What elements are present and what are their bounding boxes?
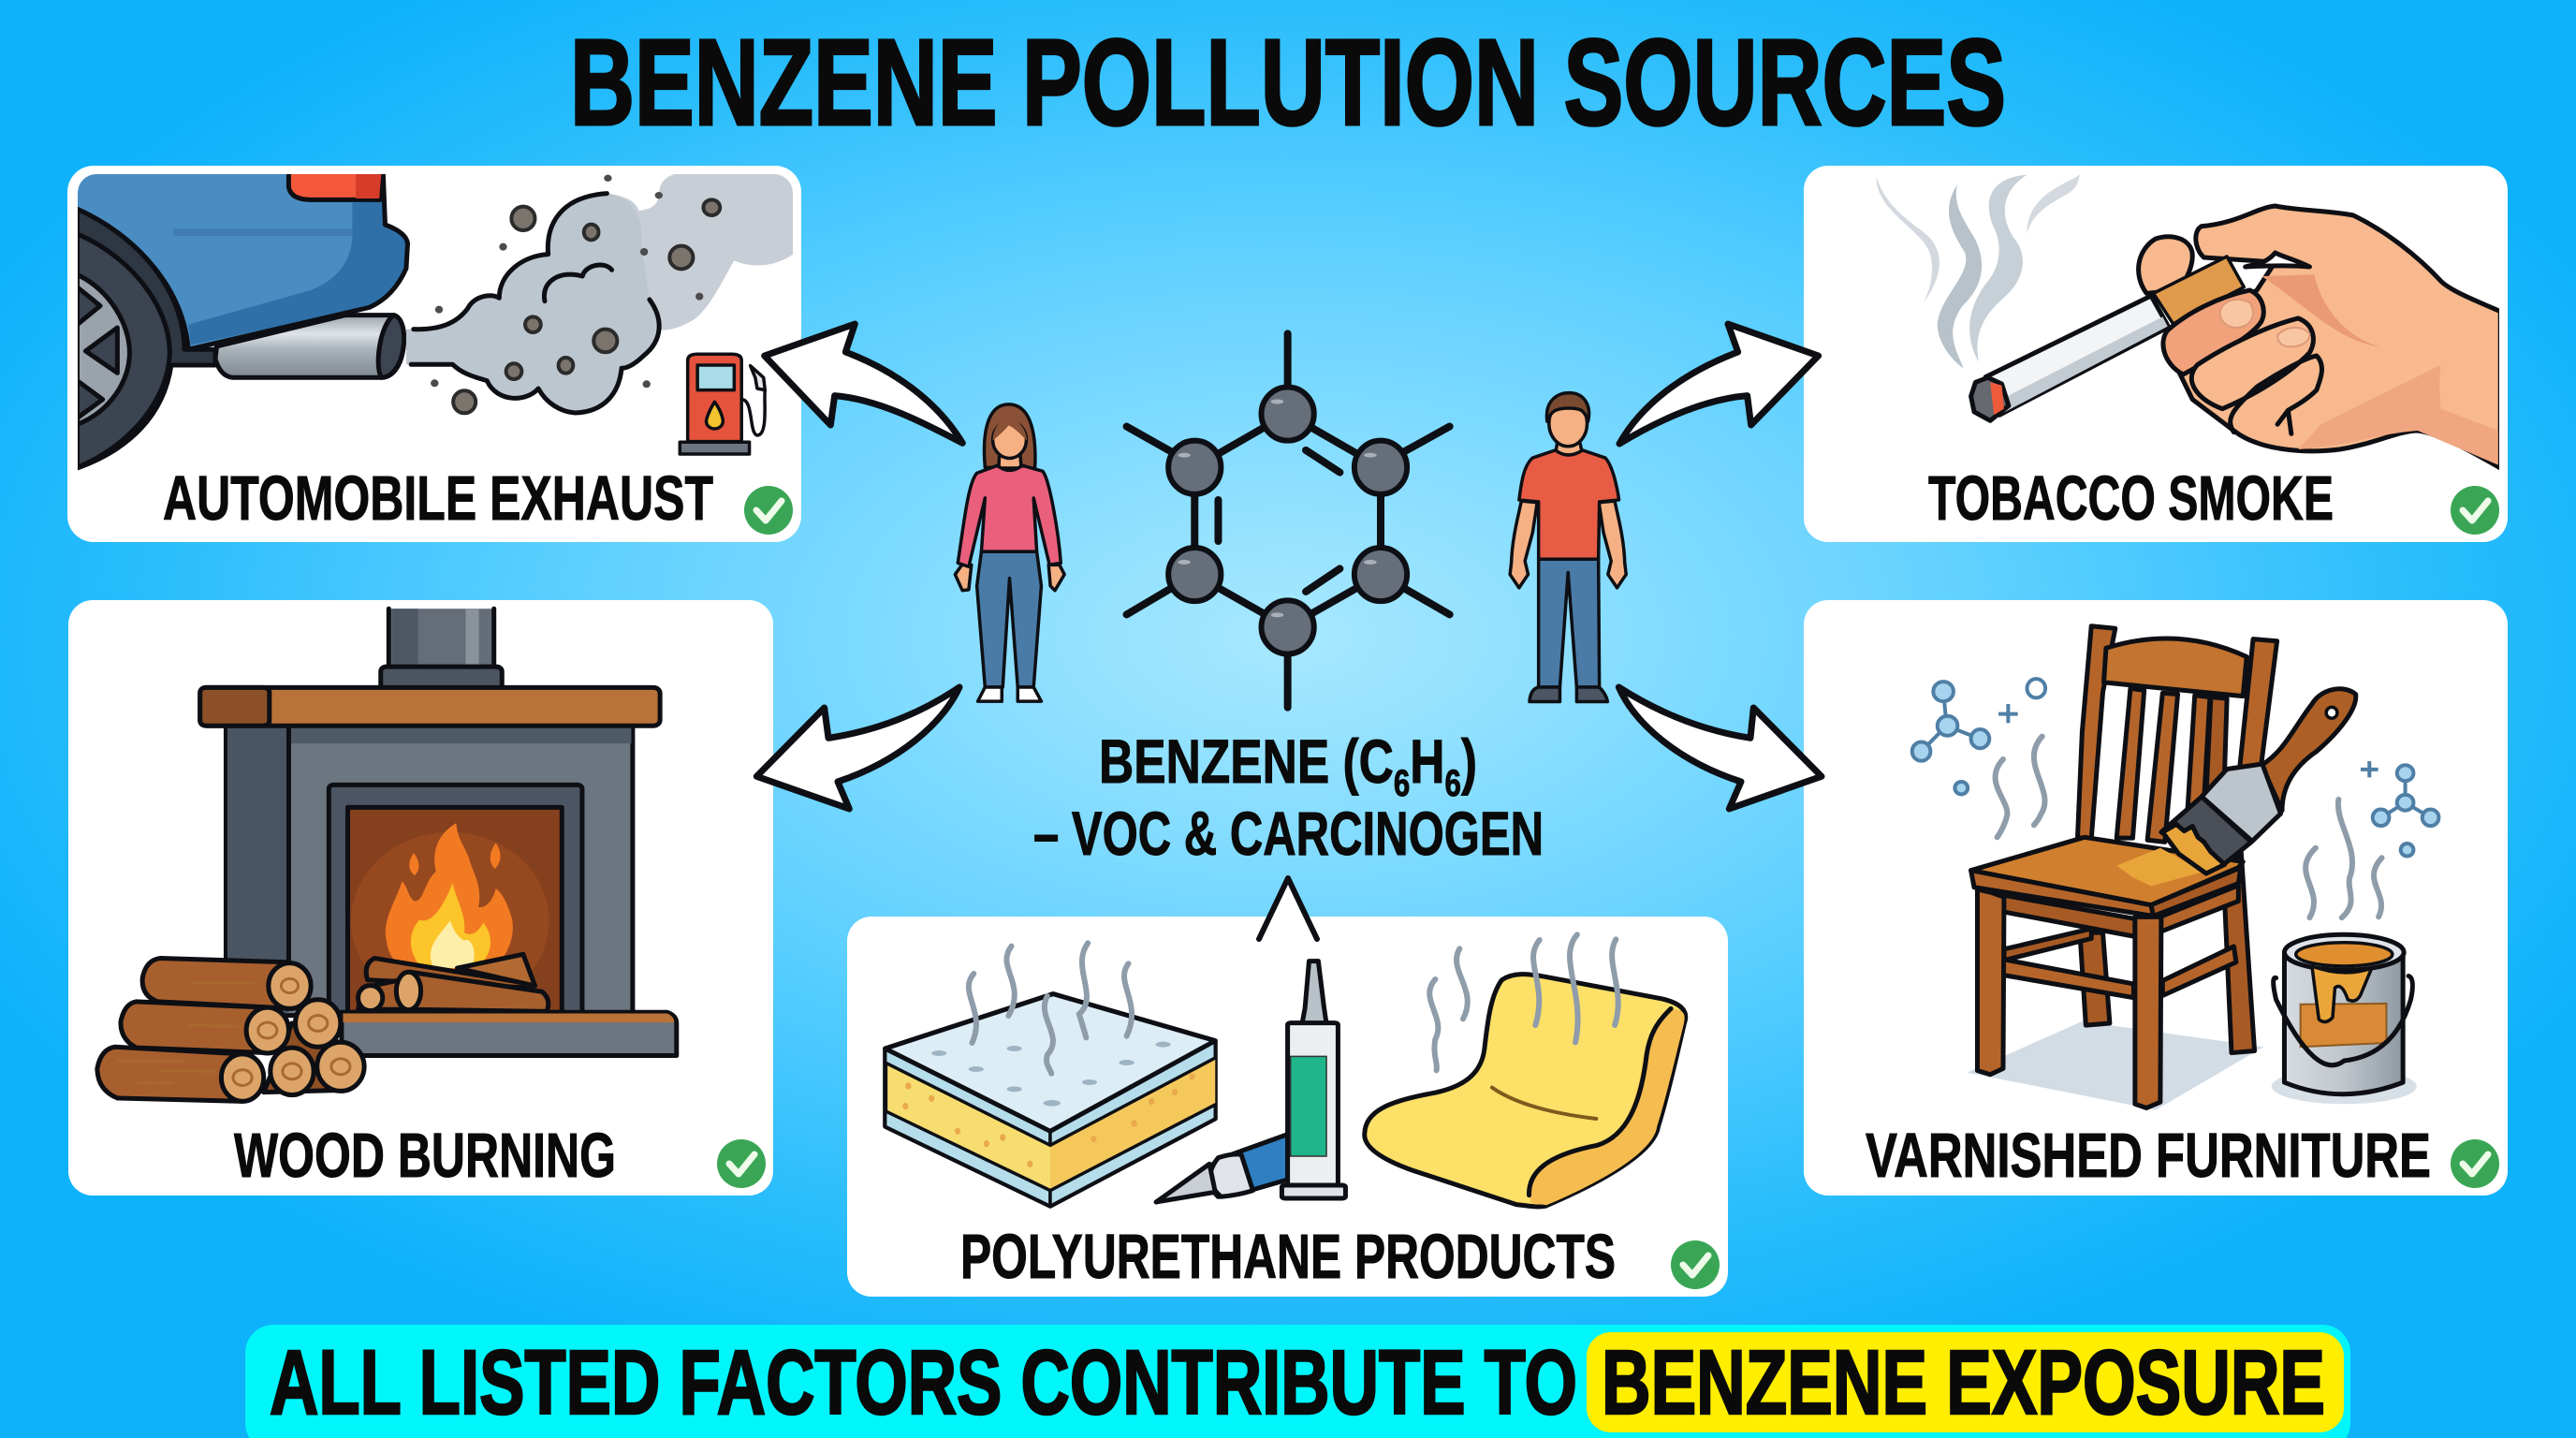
back legs and posts bbox=[2080, 932, 2110, 1025]
burning logs bbox=[366, 959, 531, 988]
yellow foam cushion bbox=[1365, 975, 1686, 1207]
label: automobile exhaust: AUTOMOBILE EXHAUST bbox=[163, 463, 713, 534]
label: wood burning: WOOD BURNING bbox=[234, 1121, 616, 1191]
caulk cartridge bbox=[1302, 961, 1326, 1023]
panel: varnished furniture bbox=[1804, 600, 2508, 1196]
sealant tube bbox=[1156, 1135, 1288, 1202]
arrow: to wood burning bbox=[756, 687, 959, 809]
illustration: chair, brush and can bbox=[1912, 626, 2438, 1110]
figure: man bbox=[1510, 393, 1626, 702]
panel: automobile exhaust bbox=[67, 166, 801, 542]
wheel bbox=[77, 209, 215, 468]
illustration: hand holding cigarette bbox=[1876, 175, 2500, 468]
mantel bbox=[200, 687, 660, 726]
arrow: to varnished furniture bbox=[1618, 687, 1822, 809]
smoke wisps bbox=[1876, 176, 1939, 302]
center label: benzene formula: ) bbox=[1461, 726, 1477, 796]
index finger bbox=[2139, 237, 2192, 293]
illustration: foam, sealant and cushion bbox=[886, 934, 1686, 1207]
title: BENZENE POLLUTION SOURCES bbox=[570, 13, 2006, 151]
banner text: ALL LISTED FACTORS CONTRIBUTE TO bbox=[270, 1331, 1577, 1433]
arrow: to automobile exhaust bbox=[765, 324, 962, 443]
top rail bbox=[2103, 638, 2247, 697]
center: people and molecule bbox=[955, 333, 1626, 708]
illustration: fireplace and logs bbox=[97, 609, 677, 1101]
flames bbox=[386, 823, 513, 970]
conclusion banner bbox=[245, 1325, 2350, 1438]
taillight bbox=[288, 171, 383, 199]
log stack bbox=[264, 1023, 341, 1093]
panel: wood burning bbox=[68, 600, 773, 1196]
main smoke cloud bbox=[406, 194, 659, 413]
highlight box bbox=[1587, 1332, 2344, 1432]
icon: green check bbox=[717, 1139, 766, 1188]
icon: green check bbox=[2451, 1139, 2499, 1188]
icon: green check bbox=[1671, 1240, 1720, 1289]
molecule: benzene ring bbox=[1127, 333, 1450, 708]
palm bbox=[2165, 206, 2500, 468]
center label: benzene formula: 6 bbox=[1394, 763, 1410, 804]
label: polyurethane products: POLYURETHANE PRODUCTS bbox=[960, 1222, 1616, 1292]
hearth bbox=[342, 1012, 677, 1056]
vapour lines bbox=[1996, 737, 2382, 917]
center label: voc and carcinogen: – VOC & CARCINOGEN bbox=[1033, 799, 1544, 868]
seat bbox=[1971, 837, 2243, 905]
center label: benzene formula: H bbox=[1410, 726, 1444, 796]
panel: polyurethane products bbox=[847, 917, 1728, 1297]
front legs bbox=[1977, 889, 2004, 1075]
vapour lines bbox=[969, 934, 1618, 1074]
cigarette bbox=[1985, 296, 2169, 415]
center label: benzene formula: 6 bbox=[1444, 763, 1461, 804]
far smoke bbox=[607, 174, 793, 330]
label: tobacco smoke: TOBACCO SMOKE bbox=[1928, 463, 2334, 534]
icon: green check bbox=[744, 486, 793, 535]
arrow: from polyurethane products bbox=[1259, 878, 1317, 939]
panel: tobacco smoke bbox=[1804, 166, 2508, 542]
paint brush bbox=[2261, 689, 2356, 811]
center label: benzene formula: BENZENE (C bbox=[1099, 726, 1476, 796]
molecule icons bbox=[1912, 679, 2438, 857]
icon: fuel pump bbox=[680, 354, 765, 454]
illustration: car and exhaust smoke bbox=[77, 171, 793, 468]
figure: woman bbox=[955, 404, 1064, 701]
exhaust pipe bbox=[215, 315, 403, 377]
slats bbox=[2116, 688, 2144, 838]
varnish can bbox=[2284, 952, 2403, 1094]
stretchers bbox=[2004, 929, 2091, 961]
soot particles bbox=[453, 199, 720, 413]
icon: green check bbox=[2451, 486, 2499, 535]
fingers bbox=[2163, 290, 2263, 374]
banner highlighted text: BENZENE EXPOSURE bbox=[1602, 1331, 2325, 1433]
arrow: to tobacco smoke bbox=[1619, 324, 1819, 444]
foam mattress bbox=[886, 994, 1215, 1206]
